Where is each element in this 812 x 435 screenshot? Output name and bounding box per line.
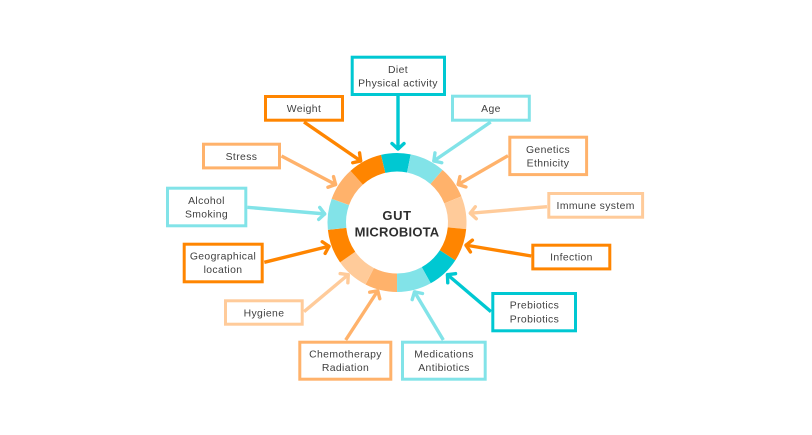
factor: Medications / Antibiotics: Antibiotics (418, 363, 470, 374)
factor: Infection (465, 245, 610, 269)
factor: Genetics / Ethnicity: Ethnicity (527, 158, 570, 169)
factor: Diet / Physical activity (352, 57, 444, 150)
factor: Immune system (469, 194, 643, 217)
factor: Diet / Physical activity: Diet (388, 65, 408, 76)
factor: Diet / Physical activity: Physical activity (358, 78, 438, 90)
factor: Stress: Stress (226, 152, 257, 163)
factor: Weight: Weight (287, 104, 321, 115)
factor: Prebiotics / Probiotics: Probiotics (510, 314, 559, 325)
factor: Infection: Infection (550, 253, 593, 264)
ring: gut microbiota segmented circle (312, 137, 482, 308)
title: GUT MICROBIOTA: MICROBIOTA (355, 224, 440, 240)
factor: Geographical location (184, 244, 330, 282)
title: GUT MICROBIOTA: GUT (382, 208, 412, 223)
factor: Hygiene: Hygiene (244, 308, 284, 319)
factor: Age (433, 96, 529, 162)
factor: Alcohol / Smoking (168, 188, 326, 226)
factor: Prebiotics / Probiotics (447, 274, 576, 331)
factor: Medications / Antibiotics: Medications (414, 350, 474, 360)
factor: Alcohol / Smoking: Smoking (185, 210, 228, 221)
factor: Chemotherapy / Radiation: Radiation (322, 363, 369, 374)
factor: Chemotherapy / Radiation (300, 290, 391, 379)
factor: Stress (204, 144, 336, 185)
factor: Geographical location: Geographical (190, 252, 256, 262)
title: GUT MICROBIOTA (355, 208, 440, 240)
factor: Hygiene (226, 274, 349, 324)
factor: Alcohol / Smoking: Alcohol (188, 196, 225, 207)
factor: Prebiotics / Probiotics: Prebiotics (510, 301, 559, 312)
factor: Chemotherapy / Radiation: Chemotherapy (309, 350, 382, 360)
factor: Genetics / Ethnicity: Genetics (526, 145, 570, 156)
factor: Immune system: Immune system (557, 201, 635, 212)
factor: Age: Age (481, 104, 501, 115)
factor: Genetics / Ethnicity (457, 137, 587, 185)
factor: Weight (266, 96, 362, 162)
factor: Geographical location: location (204, 265, 242, 276)
factor: Medications / Antibiotics (402, 291, 485, 379)
